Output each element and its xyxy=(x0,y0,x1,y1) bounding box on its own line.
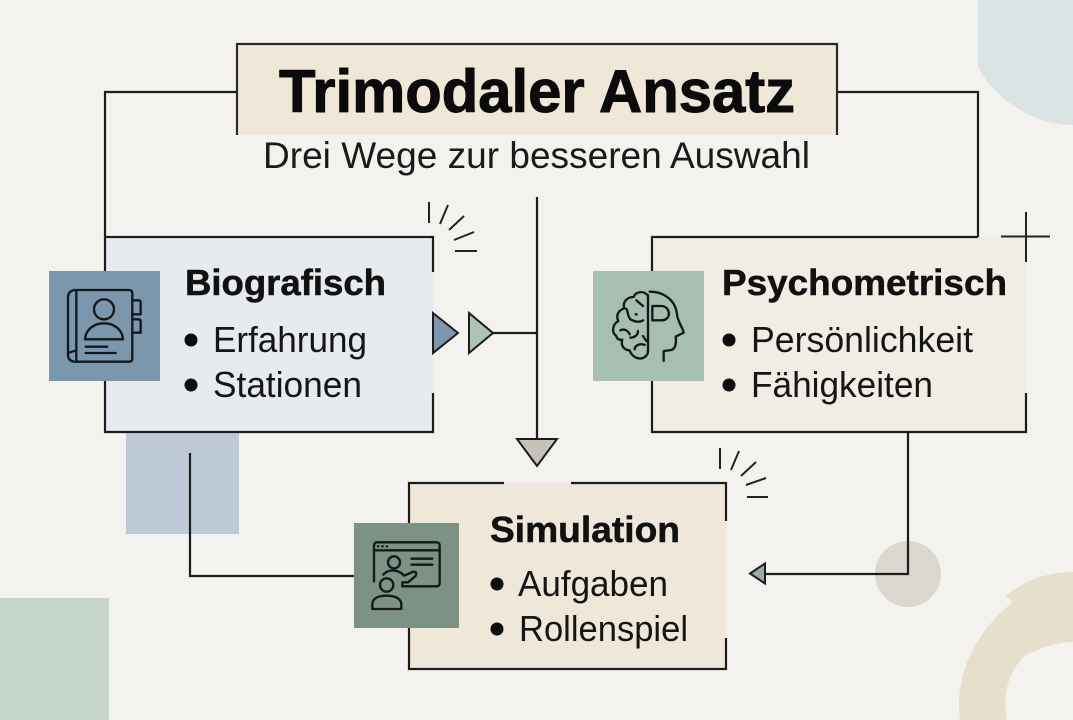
heading: Simulation: Simulation xyxy=(490,509,680,550)
list: Biografisch items: Stationen xyxy=(213,364,362,405)
list: Simulation items xyxy=(490,563,688,649)
list: Simulation items: Aufgaben xyxy=(518,563,668,604)
icon: brain and head xyxy=(593,271,704,381)
icon: presenter at screen xyxy=(354,523,459,628)
arrow: down into Simulation xyxy=(517,439,557,466)
heading: Biografisch: Biografisch xyxy=(185,262,386,303)
plus mark xyxy=(1001,212,1050,262)
panel: Biografisch xyxy=(49,237,433,432)
panel: Psychometrisch xyxy=(593,237,1026,432)
arrow: green triangle xyxy=(469,313,493,353)
connector: title to Biografisch xyxy=(105,92,237,237)
title panel xyxy=(237,44,837,135)
burst: Biografisch xyxy=(429,202,477,251)
list: Biografisch items xyxy=(184,319,367,405)
decorative shape: green square xyxy=(0,598,109,720)
list: Psychometrisch items: Persönlichkeit xyxy=(751,319,973,360)
connector: Biografisch to Simulation xyxy=(190,453,354,576)
connector: Psychometrisch to Simulation xyxy=(765,432,908,574)
title text: Trimodaler Ansatz xyxy=(279,58,795,125)
panel: Simulation xyxy=(354,483,726,669)
connector: title to Psychometrisch xyxy=(837,92,978,237)
decorative shape: blue corner xyxy=(978,0,1073,125)
arrow: left into Simulation xyxy=(750,564,765,584)
subtitle: Drei Wege zur besseren Auswahl xyxy=(263,135,810,176)
heading: Psychometrisch: Psychometrisch xyxy=(722,262,1007,303)
decorative shape: tan ring xyxy=(959,572,1073,720)
connector: centre line to Simulation xyxy=(493,197,537,439)
list: Psychometrisch items: Fähigkeiten xyxy=(751,364,933,405)
burst: Simulation xyxy=(720,448,768,497)
list: Simulation items: Rollenspiel xyxy=(519,608,688,649)
list: Biografisch items: Erfahrung xyxy=(213,319,367,360)
icon: address book xyxy=(49,271,160,381)
decorative shape: grey circle xyxy=(875,541,941,607)
decorative shape: blue rectangle xyxy=(126,433,239,534)
list: Psychometrisch items xyxy=(722,319,973,405)
arrow: blue triangle xyxy=(433,313,458,353)
